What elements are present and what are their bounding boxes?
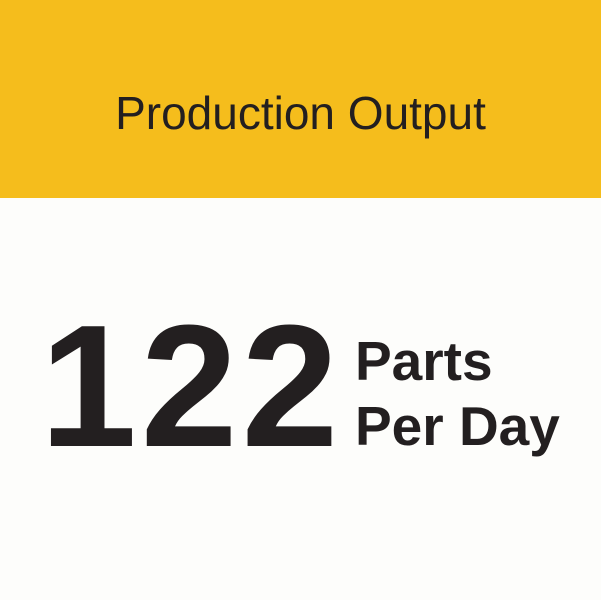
unit label <box>355 330 560 457</box>
header band <box>0 0 601 198</box>
unit label: Per Day <box>355 395 560 457</box>
title: Production Output <box>115 87 486 139</box>
unit label: Parts <box>355 330 493 392</box>
big number: 122 <box>40 288 342 483</box>
